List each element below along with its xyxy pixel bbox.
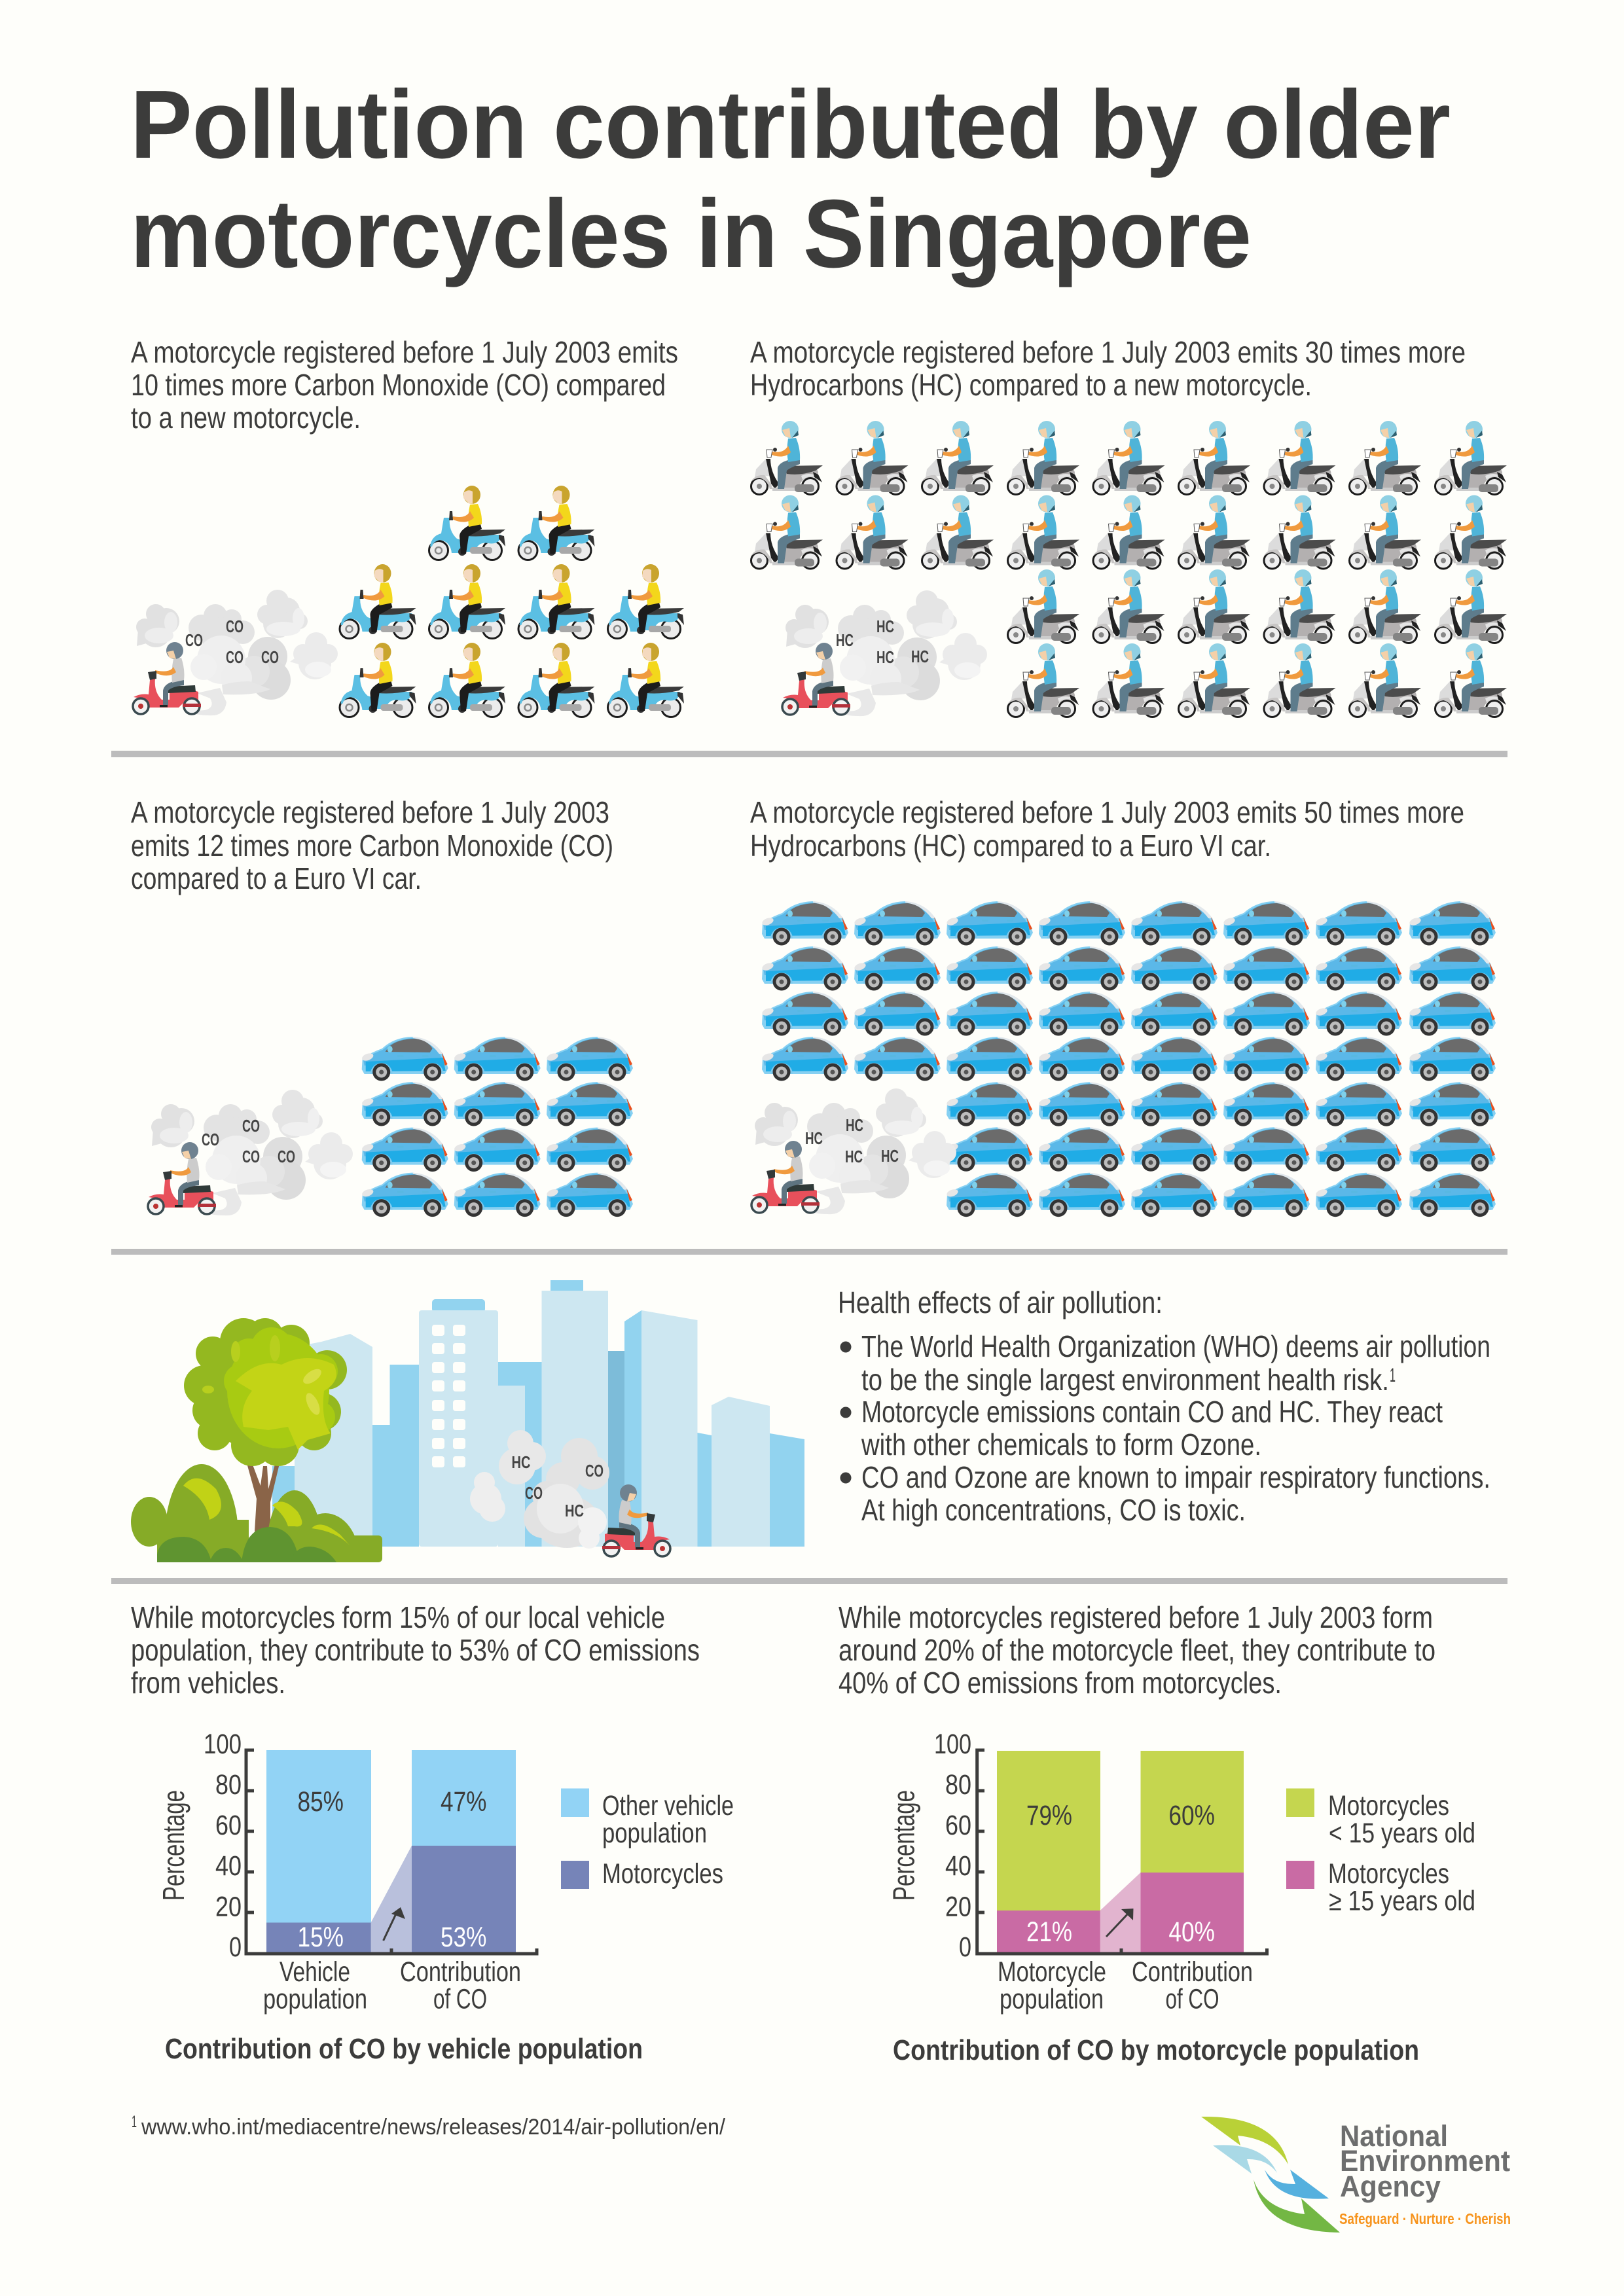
logo wordmark: Environment [1340, 2144, 1510, 2178]
arrow: upward shift [384, 1907, 405, 1941]
text block: health effects [838, 1285, 1490, 1527]
x axis labels: Motorcycle [998, 1956, 1106, 1988]
text block: health effects: Motorcycle emissions contain CO and HC. They react [861, 1395, 1443, 1429]
icon: smoking red scooter with HC: HC [876, 617, 894, 636]
text block: 30 times more HC: Hydrocarbons (HC) compared to a new motorcycle. [750, 368, 1312, 402]
title: motorcycles in Singapore [130, 180, 1252, 288]
text block: 50 times more HC [750, 795, 1464, 863]
icon: smoking red scooter with CO: CO [185, 630, 203, 650]
text block: 50 times more HC: A motorcycle registered before 1 July 2003 emits 50 times more [750, 795, 1464, 829]
icon: smoking red scooter with HC [782, 590, 987, 716]
gas labels: CO [525, 1483, 543, 1503]
y axis labels: 100 [204, 1729, 242, 1760]
icon: smoking red scooter with CO beside cars [148, 1090, 353, 1215]
icon grid: 50 cars [761, 901, 1496, 1217]
gas labels [512, 1452, 604, 1520]
text block: 12 times more CO: emits 12 times more Carbon Monoxide (CO) [131, 829, 613, 863]
value labels [297, 1786, 487, 1953]
text block: 20% of fleet, 40% of CO [839, 1600, 1435, 1700]
icon: smoking red scooter with HC beside cars [751, 1088, 956, 1214]
icon: smoking red scooter with CO beside cars: CO [278, 1147, 295, 1166]
text block: 15% of vehicles, 53% of CO [131, 1600, 700, 1700]
icon: smoking red scooter with HC: HC [876, 647, 894, 667]
logo wordmark: National [1340, 2119, 1448, 2153]
value labels: 40% [1168, 1916, 1215, 1948]
text block: 12 times more CO: compared to a Euro VI car. [131, 861, 422, 895]
x axis labels: of CO [433, 1984, 487, 2015]
y axis labels: 0 [229, 1931, 242, 1963]
illustration: city, tree and scooter [131, 1280, 804, 1562]
text block: 12 times more CO [131, 795, 613, 895]
chart axes [977, 1750, 1267, 1954]
icon: smoking red scooter with CO beside cars: CO [242, 1116, 260, 1136]
panel: vehicle population chart [131, 1600, 734, 2065]
value labels: 79% [1026, 1800, 1072, 1831]
y axis labels: 80 [215, 1769, 242, 1801]
icon: smoking red scooter with HC beside cars: HC [805, 1128, 823, 1148]
y axis labels: 0 [959, 1931, 971, 1963]
text block: health effects: to be the single largest environment health risk. [861, 1363, 1389, 1397]
text block: health effects: with other chemicals to form Ozone. [861, 1427, 1261, 1462]
text block: 20% of fleet, 40% of CO: around 20% of the motorcycle fleet, they contribute to [839, 1633, 1435, 1667]
arrow: upward shift [1106, 1909, 1134, 1937]
icon grid: 30 new scooters [751, 421, 1507, 717]
y axis labels [934, 1729, 971, 1963]
icon: smoking red scooter with HC beside cars: HC [881, 1146, 899, 1166]
value labels [1026, 1800, 1215, 1948]
y axis labels: 20 [215, 1892, 242, 1923]
icon: red scooter [602, 1484, 670, 1556]
legend: Motorcycles [1328, 1858, 1449, 1890]
footnote: 1 [132, 2113, 137, 2131]
logo wordmark [1339, 2119, 1511, 2227]
y axis labels: 60 [215, 1810, 242, 1841]
logo mark [1201, 2117, 1340, 2233]
icon grid: 10 new motorcycles [340, 486, 684, 717]
legend: population [602, 1818, 707, 1849]
icon: smoking red scooter with CO: CO [226, 617, 244, 636]
y axis labels: 40 [945, 1850, 971, 1882]
chart title: Contribution of CO by motorcycle population [893, 2034, 1419, 2066]
icon grid: 12 cars [361, 1037, 633, 1217]
gas labels: HC [512, 1452, 531, 1472]
text block: 10 times more CO: to a new motorcycle. [131, 401, 361, 435]
value labels: 53% [441, 1922, 487, 1953]
y axis labels: 40 [215, 1850, 242, 1882]
panel: motorcycle population chart [839, 1600, 1475, 2066]
icon: smoking red scooter with CO beside cars: CO [202, 1130, 219, 1149]
value labels: 47% [441, 1786, 487, 1818]
text block: 10 times more CO [131, 335, 678, 435]
icon: smoking red scooter with CO: CO [226, 647, 244, 667]
text block: health effects: Health effects of air pollution: [838, 1285, 1163, 1319]
x axis labels: population [1000, 1984, 1104, 2015]
gas labels: HC [565, 1501, 584, 1520]
x axis labels [263, 1956, 521, 2015]
text block: health effects: CO and Ozone are known to impair respiratory functions. [861, 1460, 1490, 1494]
bushes [131, 1464, 382, 1562]
icon: smoking red scooter with HC: HC [911, 647, 929, 666]
text block: 10 times more CO: 10 times more Carbon Monoxide (CO) compared [131, 368, 666, 402]
value labels: 60% [1168, 1800, 1215, 1831]
text block: 15% of vehicles, 53% of CO: from vehicles. [131, 1666, 285, 1700]
y axis title: Percentage [886, 1790, 920, 1901]
icon: smoking red scooter with HC beside cars: HC [845, 1147, 863, 1166]
buildings [272, 1280, 804, 1547]
logo wordmark: Safeguard · Nurture · Cherish [1339, 2210, 1511, 2227]
value labels: 15% [297, 1922, 344, 1953]
text block: 50 times more HC: Hydrocarbons (HC) compared to a Euro VI car. [750, 829, 1271, 863]
legend: ≥ 15 years old [1329, 1886, 1475, 1917]
value labels: 21% [1026, 1916, 1072, 1948]
x axis labels: population [263, 1984, 367, 2015]
legend: < 15 years old [1329, 1818, 1475, 1849]
legend: Other vehicle [602, 1790, 734, 1821]
panel: HC compared to new motorcycle [750, 335, 1507, 717]
stacked bar chart: contribution of CO by vehicle population [156, 1729, 734, 2065]
text block: 20% of fleet, 40% of CO: 40% of CO emissions from motorcycles. [839, 1666, 1282, 1700]
stacked bar chart: contribution of CO by motorcycle population [886, 1729, 1475, 2066]
legend: Motorcycles [1328, 1790, 1449, 1821]
value labels: 85% [297, 1786, 344, 1818]
footnote: www.who.int/mediacentre/news/releases/2014/air-pollution/en/ [141, 2115, 726, 2140]
icon: smoking red scooter with CO: CO [261, 647, 279, 667]
y axis title: Percentage [156, 1790, 190, 1901]
x axis labels: of CO [1165, 1984, 1219, 2015]
text block: 30 times more HC: A motorcycle registered before 1 July 2003 emits 30 times more [750, 335, 1466, 369]
legend [561, 1788, 734, 1890]
chart title: Contribution of CO by vehicle population [165, 2033, 643, 2065]
x axis labels [998, 1956, 1253, 2015]
logo: National Environment Agency [1201, 2117, 1511, 2233]
x axis labels: Contribution [1132, 1956, 1253, 1988]
text block: 12 times more CO: A motorcycle registered before 1 July 2003 [131, 795, 609, 829]
text block: 15% of vehicles, 53% of CO: population, they contribute to 53% of CO emissions [131, 1633, 700, 1667]
text block: health effects: 1 [1390, 1365, 1396, 1386]
y axis labels [204, 1729, 242, 1963]
logo wordmark: Agency [1340, 2170, 1441, 2203]
icon: smoking red scooter with HC: HC [836, 630, 854, 650]
text block: health effects: At high concentrations, CO is toxic. [861, 1493, 1246, 1527]
tree [184, 1318, 347, 1532]
gas labels: CO [585, 1461, 604, 1480]
panel: CO compared to Euro VI car [131, 795, 633, 1217]
text block: 20% of fleet, 40% of CO: While motorcycles registered before 1 July 2003 form [839, 1600, 1433, 1634]
smoke cloud [470, 1430, 609, 1549]
icon: smoking red scooter with CO beside cars: CO [242, 1147, 260, 1166]
y axis labels: 60 [945, 1810, 971, 1841]
panel: CO compared to new motorcycle [131, 335, 684, 717]
text block: 30 times more HC [750, 335, 1466, 402]
chart axes [246, 1750, 537, 1954]
panel: HC compared to Euro VI car [750, 795, 1496, 1217]
title: Pollution contributed by older [130, 71, 1451, 179]
x axis labels: Contribution [400, 1956, 521, 1988]
title [130, 71, 1451, 288]
text block: health effects: The World Health Organization (WHO) deems air pollution [861, 1329, 1490, 1363]
x axis labels: Vehicle [280, 1956, 350, 1988]
y axis labels: 100 [934, 1729, 971, 1760]
y axis labels: 80 [945, 1769, 971, 1801]
text block: 15% of vehicles, 53% of CO: While motorcycles form 15% of our local vehicle [131, 1600, 665, 1634]
icon: smoking red scooter with CO [133, 590, 338, 715]
icon: smoking red scooter with HC beside cars: HC [846, 1115, 863, 1135]
y axis labels: 20 [945, 1892, 971, 1923]
legend [1286, 1788, 1475, 1917]
text block: 10 times more CO: A motorcycle registered before 1 July 2003 emits [131, 335, 678, 369]
legend: Motorcycles [602, 1858, 723, 1890]
